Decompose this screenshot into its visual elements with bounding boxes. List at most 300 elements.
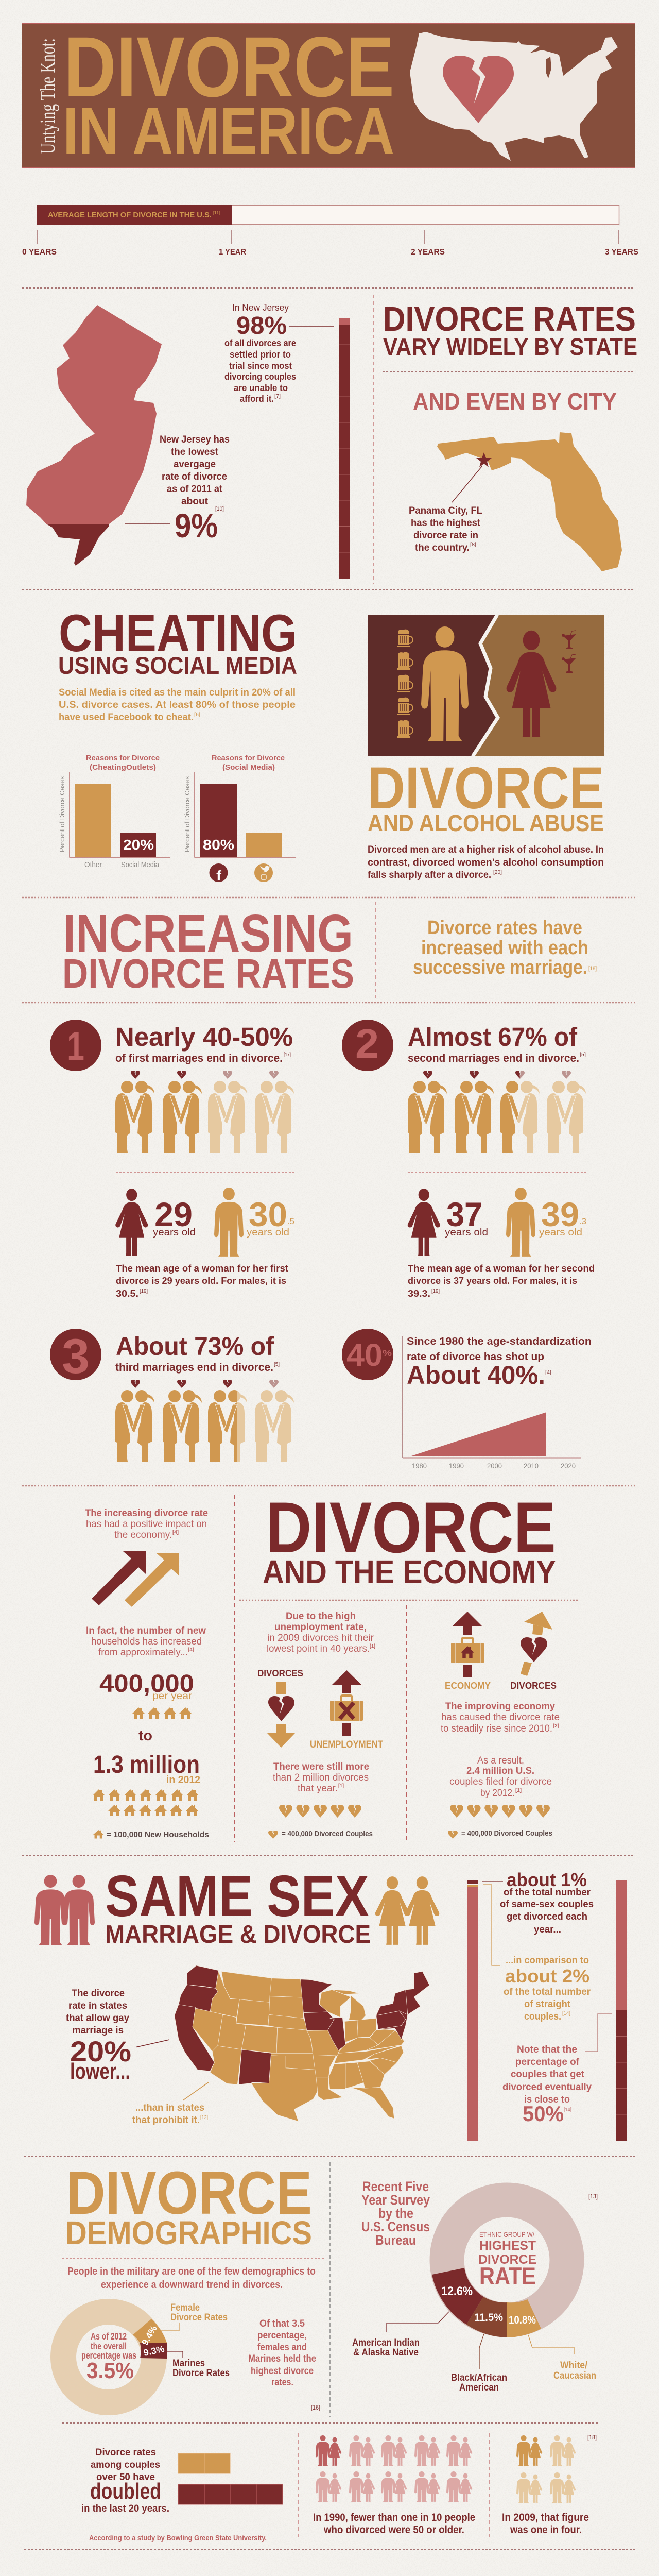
stat: 1.3 million in 2012: in 2012 (166, 1774, 200, 1786)
text: females and marines: rates. (271, 2377, 293, 2388)
text: about 2 percent: about 2% (505, 1965, 589, 1987)
text: about 73 percent: About 73% of (116, 1332, 274, 1361)
badge: number 1: 1 (67, 1023, 84, 1069)
text: 20 percent lower: rate in states (68, 2001, 127, 2011)
source note: 18: [18] (587, 2434, 597, 2441)
stat: nine percent: 9% (175, 506, 218, 545)
chart: reasons for divorce cheating outlets: Other (84, 860, 102, 869)
text: about 2 percent: ...in comparison to (506, 1955, 589, 1966)
text: about 73 percent (115, 1332, 280, 1374)
chart: average length of divorce timeline: 0 YEARS (22, 248, 57, 257)
text: social media paragraph: have used Facebook to cheat. (59, 712, 194, 723)
text: mean age first divorce: [19] (140, 1289, 148, 1294)
icon: man age 39.3 (506, 1188, 586, 1257)
label: black african american (451, 2334, 507, 2393)
stat: 400,000 per year: 400,000 (99, 1670, 194, 1698)
text: 1990 figure: who divorced were 50 or older. (323, 2524, 464, 2536)
icon: man age 30.5 (214, 1188, 294, 1257)
text: new jersey lowest rate: rate of divorce (162, 471, 227, 482)
text: about 2 percent (504, 1955, 591, 2022)
text: mean age second divorce: divorce is 37 years old. For males, it is (408, 1276, 577, 1286)
text: 1990 figure: In 1990, fewer than one in 10 people (313, 2512, 475, 2523)
icon row: five hearts (279, 1805, 361, 1818)
text: positive impact: [4] (172, 1530, 179, 1535)
text: close to 50 percent: Note that the (517, 2044, 577, 2055)
text: 20 percent lower (66, 1988, 131, 2084)
badge: 40 percent: 40 (346, 1337, 383, 1372)
text: about 2 percent: of straight (524, 1999, 571, 2010)
stat: 1.3 million in 2012: 1.3 million (93, 1751, 200, 1778)
heading: divorce: DIVORCE (368, 755, 604, 821)
label: american indian: American Indian (352, 2337, 420, 2348)
text: to: to (138, 1727, 152, 1743)
text: 2009 figure: was one in four. (510, 2524, 582, 2536)
text: high unemployment: in 2009 divorces hit their (267, 1633, 374, 1643)
text: new jersey lowest rate: [10] (215, 506, 224, 512)
text: nearly 40-50 percent: [17] (284, 1052, 291, 1058)
text: highest divorce rate: DIVORCE (478, 2252, 536, 2267)
text: high unemployment (267, 1611, 375, 1654)
icon: divorces rising: DIVORCES (510, 1681, 557, 1691)
text: 20 percent lower: that allow gay (66, 2013, 129, 2024)
text: high unemployment: [1] (370, 1643, 375, 1649)
heading: divorce and the economy: AND THE ECONOMY (263, 1553, 556, 1590)
text: military downward trend: People in the military are one of the few demographics to (67, 2266, 316, 2277)
text: about 1 percent: year... (534, 1924, 561, 1935)
chart: reasons for divorce social media: 80% (203, 837, 234, 853)
chart: military donut: percentage was (81, 2350, 136, 2361)
icon: woman age 29 (115, 1189, 196, 1256)
text: social media paragraph: [6] (194, 712, 200, 718)
text: highest divorce rate: ETHNIC GROUP W/ (479, 2230, 534, 2239)
label: white caucasian: White/ (560, 2360, 588, 2371)
heading: and even by city: AND EVEN BY CITY (413, 388, 617, 415)
text: females and marines: highest divorce (251, 2366, 314, 2377)
chart: military donut: the overall (91, 2341, 127, 2351)
text: 20 percent lower: The divorce (72, 1988, 125, 1999)
text: positive impact (85, 1508, 208, 1540)
text: doubled: doubled (90, 2479, 161, 2504)
legend: divorced couples: = 400,000 Divorced Couples (282, 1829, 373, 1838)
label: marines divorce rates: Marines (172, 2358, 205, 2369)
chart: reasons for divorce cheating outlets: Percent of Divorce Cases (58, 776, 66, 852)
chart: ethnic donut: 11.5% (474, 2312, 503, 2324)
text: almost 67 percent: Almost 67% of (408, 1022, 578, 1052)
text: mean age first divorce: 30.5. (116, 1289, 138, 1299)
text: settled prior to trial (224, 302, 296, 404)
icon: woman age 29: years old (153, 1227, 196, 1238)
panel: title banner (22, 20, 635, 168)
text: about 1 percent (500, 1869, 594, 1935)
text: still 2 million: There were still more (273, 1761, 369, 1772)
panel: 2009 one in four (502, 2434, 597, 2536)
text: census bureau survey: Recent Five (362, 2179, 429, 2194)
chart: reasons for divorce social media: Reasons for Divorce (212, 754, 285, 762)
text: improving economy: The improving economy (445, 1701, 555, 1712)
label: black african american: Black/African (451, 2372, 507, 2383)
text: census bureau survey (361, 2179, 430, 2248)
text: still 2 million: [1] (338, 1783, 344, 1789)
text: improving economy: has caused the divorce rate (441, 1712, 560, 1723)
chart: reasons for divorce cheating outlets: 20% (123, 837, 154, 853)
text: females and marines: females and (257, 2342, 307, 2353)
source note: 13: [13] (588, 2193, 598, 2200)
icon row: couples and hearts (115, 1071, 294, 1153)
text: 1990 figure (313, 2512, 475, 2536)
text: close to 50 percent: [14] (564, 2107, 571, 2113)
stat: 400,000 per year: per year (152, 1691, 193, 1702)
chart: area rise 1980 to 2010: 2000 (487, 1462, 502, 1470)
icon grid: four couples (516, 2435, 576, 2503)
icon: economy rising: ECONOMY (445, 1681, 491, 1691)
text: rates increase with each marriage: successive marriage. (413, 957, 587, 978)
label: american indian (352, 2312, 449, 2358)
heading: same sex: SAME SEX (105, 1863, 369, 1928)
text: settled prior to trial: settled prior to (230, 349, 291, 360)
text: nearly 40-50 percent: of first marriages end in divorce. (115, 1052, 283, 1064)
text: highest divorce rate (478, 2230, 536, 2290)
badge: 40 percent (342, 1329, 393, 1380)
icon row: couples and hearts (115, 1380, 294, 1462)
icon: divorces falling (257, 1668, 303, 1748)
label: marines divorce rates: Divorce Rates (172, 2368, 230, 2379)
text: nearly 40-50 percent: Nearly 40-50% (115, 1022, 293, 1052)
panel: cheating using social media (58, 604, 297, 883)
title: in america: IN AMERICA (63, 94, 394, 168)
panel: couples over fifty (81, 2447, 283, 2543)
text: close to 50 percent: couples that get (511, 2069, 585, 2080)
heading: increasing divorce rates (62, 904, 354, 996)
heading: cheating: CHEATING (59, 604, 297, 663)
text: 20 percent lower: 20% (70, 2035, 131, 2067)
map: united states by marriage law (175, 1965, 429, 2121)
panel: improving economy (441, 1612, 560, 1839)
text: almost 67 percent (408, 1022, 586, 1064)
heading: increasing divorce rates: INCREASING (63, 904, 353, 963)
panel: third marriages (50, 1329, 294, 1462)
icon: woman age 29: 29 (154, 1195, 193, 1233)
text: almost 67 percent: second marriages end in divorce. (408, 1052, 579, 1064)
text: 20 percent lower: lower... (70, 2059, 130, 2084)
panel: ethnic group donut (352, 2179, 598, 2393)
text: improving economy: [2] (553, 1723, 559, 1729)
label: white caucasian (528, 2335, 596, 2381)
text: alcohol paragraph (368, 844, 604, 880)
heading: divorce rates: DIVORCE RATES (383, 300, 636, 338)
icon: unemployment rising (310, 1670, 383, 1750)
text: still 2 million: than 2 million divorces (273, 1772, 369, 1783)
badge: number 3 (50, 1329, 101, 1384)
text: mean age second divorce: The mean age of a woman for her second (408, 1263, 595, 1274)
text: panama city: Panama City, FL (409, 505, 482, 516)
text: still 2 million: that year. (298, 1783, 338, 1794)
text: 2.4 million (449, 1755, 552, 1799)
chart: military donut: As of 2012 (91, 2331, 127, 2342)
text: 2.4 million: 2.4 million U.S. (466, 1766, 534, 1776)
text: mean age first divorce (116, 1263, 288, 1299)
heading: demographics: DEMOGRAPHICS (65, 2214, 312, 2251)
text: panama city: divorce rate in (413, 530, 478, 541)
title: divorce: DIVORCE (64, 20, 394, 115)
text: close to 50 percent: percentage of (515, 2057, 580, 2067)
chart: reasons for divorce cheating outlets: Reasons for Divorce (86, 754, 160, 762)
panel: first marriages (50, 1020, 294, 1299)
text: close to 50 percent (502, 2044, 592, 2126)
legend: divorced couples: = 400,000 Divorced Couples (461, 1829, 552, 1838)
text: mean age second divorce: [19] (431, 1289, 440, 1294)
chart: reasons for divorce cheating outlets: Social Media (121, 860, 160, 869)
chart: doubling blocks (178, 2453, 283, 2504)
label: black african american: American (459, 2382, 499, 2393)
text: 2.4 million: by 2012. (480, 1788, 515, 1799)
chart: average length of divorce timeline: 2 YEARS (411, 248, 445, 257)
text: new households: from approximately... (98, 1647, 188, 1658)
text: new jersey lowest rate: avergage (174, 459, 216, 470)
chart: reasons for divorce social media: (Social Media) (222, 763, 275, 772)
chart: reasons for divorce cheating outlets (58, 754, 170, 869)
text: panama city: [8] (470, 542, 476, 548)
text: females and marines (248, 2318, 316, 2388)
heading: increasing divorce rates: DIVORCE RATES (62, 951, 354, 996)
panel: 1990 one in ten (313, 2435, 475, 2536)
text: 2009 figure (502, 2512, 589, 2536)
text: still 2 million (273, 1761, 369, 1794)
text: improving economy (441, 1701, 560, 1734)
text: doubled: in the last 20 years. (81, 2503, 169, 2514)
chart: average length of divorce timeline: [11] (213, 210, 220, 215)
text: settled prior to trial: trial since most (229, 361, 292, 371)
icon: two rising arrows (92, 1551, 179, 1607)
text: alcohol paragraph: [20] (493, 870, 502, 875)
text: new jersey lowest rate: as of 2011 at (167, 484, 223, 495)
illustration: man and woman with drinks (368, 615, 604, 756)
text: rates increase with each marriage: Divorce rates have (427, 917, 582, 939)
text: close to 50 percent: is close to (524, 2094, 570, 2105)
icon: man age 30.5: years old (247, 1227, 289, 1238)
text: new households: households has increased (91, 1636, 202, 1647)
text: age-standardization rate (407, 1336, 592, 1389)
text: settled prior to trial: divorcing couples (224, 371, 296, 382)
text: almost 67 percent: [5] (580, 1052, 586, 1058)
icon row: couples and hearts (408, 1071, 586, 1153)
chart: military donut: 9.3% (143, 2344, 165, 2358)
label: marines divorce rates (167, 2351, 230, 2379)
icon: man age 39.3: years old (539, 1227, 582, 1238)
text: social media paragraph: U.S. divorce cases. At least 80% of those people (59, 700, 296, 710)
icon: woman age 37: years old (445, 1227, 488, 1238)
text: panama city: the country. (415, 543, 470, 553)
text: census bureau survey: U.S. Census (361, 2219, 430, 2234)
badge: 40 percent: % (383, 1348, 392, 1358)
text: military downward trend: experience a downward trend in divorces. (101, 2279, 283, 2291)
chart: area rise 1980 to 2010: 2020 (561, 1462, 576, 1470)
text: nearly 40-50 percent (115, 1022, 293, 1064)
icon row: four houses (132, 1707, 192, 1719)
text: settled prior to trial: 98% (236, 312, 287, 340)
text: about 1 percent: about 1% (507, 1869, 587, 1890)
text: census bureau survey: Year Survey (361, 2192, 430, 2208)
chart: military donut (63, 2312, 167, 2402)
text: settled prior to trial: In New Jersey (232, 302, 289, 313)
text: settled prior to trial: [7] (274, 394, 281, 399)
text: social media paragraph: Social Media is cited as the main culprit in 20% of all (59, 687, 296, 698)
chart: area rise 1980 to 2010: 1980 (412, 1462, 427, 1470)
chart: area rise 1980 to 2010: 2010 (524, 1462, 539, 1470)
text: panama city (409, 505, 482, 553)
icon: facebook: f (216, 868, 221, 883)
panel: 40 percent rise since 1980 (342, 1329, 592, 1470)
chart: area rise 1980 to 2010: 1990 (449, 1462, 464, 1470)
text: about 2 percent: couples. (524, 2011, 561, 2022)
text: alcohol paragraph: Divorced men are at a higher risk of alcohol abuse. In (368, 844, 604, 855)
panel: same sex marriage and divorce (34, 1863, 627, 2141)
text: age-standardization rate: Since 1980 the age-standardization (407, 1336, 592, 1347)
icon: divorces rising (510, 1612, 557, 1691)
text: new households: In fact, the number of new (86, 1625, 206, 1636)
text: social media paragraph (59, 687, 296, 723)
heading: marriage and divorce: MARRIAGE & DIVORCE (105, 1921, 371, 1948)
icon: two men (34, 1875, 95, 1945)
text: bowling green study: According to a study by Bowling Green State University. (89, 2534, 267, 2543)
text: than in states that prohibit it: that prohibit it. (132, 2115, 200, 2126)
text: age-standardization rate: About 40%. (407, 1361, 545, 1389)
label: american indian: & Alaska Native (353, 2347, 419, 2358)
label: female divorce rates: Female (170, 2302, 200, 2313)
text: new households (86, 1625, 206, 1658)
text: military downward trend (67, 2266, 316, 2291)
badge: number 2: 2 (355, 1021, 379, 1066)
badge: number 3: 3 (62, 1329, 90, 1384)
panel: households and economy (85, 1508, 209, 1839)
chart: ethnic donut: 12.6% (441, 2284, 473, 2298)
chart: ethnic donut: 10.8% (509, 2314, 536, 2326)
icon: facebook (209, 863, 228, 883)
icon: us map with broken heart (410, 32, 618, 161)
text: age-standardization rate: [4] (545, 1370, 551, 1376)
panel: unemployment and divorces (257, 1611, 383, 1839)
text: rates increase with each marriage (413, 917, 597, 978)
text: settled prior to trial: are unable to (234, 383, 288, 393)
chart: average length of divorce timeline: 3 YEARS (605, 248, 638, 257)
text: new jersey lowest rate: New Jersey has (160, 434, 230, 445)
text: panama city: has the highest (411, 518, 481, 529)
icon: woman age 37 (408, 1189, 488, 1256)
icon: woman age 37: 37 (446, 1195, 482, 1233)
text: settled prior to trial: of all divorces are (224, 338, 296, 348)
text: than in states that prohibit it (132, 2103, 208, 2126)
icon: new jersey map (26, 305, 162, 566)
text: doubled: Divorce rates (95, 2447, 156, 2458)
text: improving economy: to steadily rise since 2010. (441, 1723, 552, 1734)
text: alcohol paragraph: falls sharply after a divorce. (368, 870, 491, 880)
text: alcohol paragraph: contrast, divorced women's alcohol consumption (368, 857, 604, 868)
heading: vary widely by state: VARY WIDELY BY STATE (383, 333, 637, 360)
icon: two women (375, 1876, 439, 1945)
text: new jersey lowest rate (160, 434, 230, 512)
icon rows: thirteen houses (93, 1789, 199, 1816)
icon: man age 30.5: 30 (249, 1195, 287, 1233)
icon: twitter and instagram (254, 863, 273, 882)
text: new households: [4] (188, 1647, 194, 1653)
label: female divorce rates (161, 2302, 228, 2330)
text: females and marines: Of that 3.5 (259, 2318, 305, 2329)
text: highest divorce rate: HIGHEST (479, 2239, 536, 2253)
text: doubled: over 50 have (96, 2472, 155, 2483)
icon: divorces falling: DIVORCES (257, 1668, 303, 1679)
text: 20 percent lower: marriage is (72, 2025, 124, 2036)
text: than in states that prohibit it: ...than in states (135, 2103, 204, 2113)
text: about 73 percent: [5] (274, 1362, 280, 1367)
source note: 16: [16] (311, 2404, 320, 2411)
text: mean age first divorce: divorce is 29 years old. For males, it is (116, 1276, 286, 1286)
chart: reasons for divorce cheating outlets: (CheatingOutlets) (90, 763, 156, 772)
panel: divorce and alcohol abuse (368, 615, 604, 880)
text: females and marines: percentage, (257, 2330, 307, 2341)
text: new jersey lowest rate: the lowest (171, 447, 219, 457)
text: 2.4 million: [1] (515, 1788, 522, 1793)
icon: unemployment rising: UNEMPLOYMENT (310, 1739, 383, 1750)
text: rates increase with each marriage: increased with each (421, 937, 588, 959)
text: new jersey lowest rate: about (181, 496, 209, 507)
text: about 1 percent: of the total number (504, 1887, 591, 1898)
text: 2.4 million: couples filed for divorce (449, 1776, 552, 1787)
text: census bureau survey: by the (378, 2206, 413, 2221)
chart: military donut: 9.4% (140, 2324, 159, 2347)
text: than in states that prohibit it: [12] (200, 2115, 208, 2121)
label: female divorce rates: Divorce Rates (170, 2312, 228, 2323)
text: about 2 percent: of the total number (504, 1987, 591, 1997)
text: settled prior to trial: afford it. (240, 394, 274, 404)
text: 2009 figure: In 2009, that figure (502, 2512, 589, 2523)
text: close to 50 percent: divorced eventually (502, 2082, 592, 2093)
icon: man age 30.5: .5 (287, 1216, 294, 1226)
text: mean age second divorce: 39.3. (408, 1289, 430, 1299)
heading: using social media: USING SOCIAL MEDIA (58, 652, 297, 679)
heading: and alcohol abuse: AND ALCOHOL ABUSE (368, 810, 604, 836)
icon: economy rising (445, 1612, 491, 1691)
text: about 1 percent: of same-sex couples (500, 1899, 594, 1910)
icon grid: ten couples (316, 2435, 472, 2502)
text: 2.4 million: As a result, (477, 1755, 524, 1766)
legend: new households: = 100,000 New Households (107, 1831, 209, 1839)
chart: military donut: 3.5% (86, 2358, 134, 2383)
panel: new jersey statistics (26, 302, 350, 579)
icon row: six hearts (450, 1805, 550, 1818)
chart: 98 percent stacked bar (339, 318, 350, 579)
text: highest divorce rate: RATE (479, 2262, 536, 2290)
text: rates increase with each marriage: [18] (588, 965, 597, 972)
panel: divorce demographics military (62, 2159, 324, 2411)
text: females and marines: Marines held the (248, 2353, 316, 2364)
text: mean age first divorce: The mean age of a woman for her first (116, 1263, 288, 1274)
text: close to 50 percent: 50% (523, 2102, 564, 2126)
text: doubled: among couples (91, 2460, 160, 2470)
heading: divorce: DIVORCE (66, 2159, 312, 2227)
label: white caucasian: Caucasian (553, 2370, 596, 2381)
chart: right percentage bar (585, 1880, 627, 2141)
chart: average length of divorce timeline: AVERAGE LENGTH OF DIVORCE IN THE U.S. (48, 211, 212, 219)
text: positive impact: has had a positive impact on (86, 1519, 207, 1530)
text: positive impact: The increasing divorce rate (85, 1508, 208, 1519)
icon: man age 39.3: 39 (541, 1195, 579, 1233)
text: about 1 percent: get divorced each (507, 1911, 587, 1922)
heading: divorce and the economy: DIVORCE (266, 1487, 556, 1568)
chart: average length of divorce timeline: 1 YEAR (219, 248, 246, 257)
chart: ethnic donut (432, 2200, 567, 2337)
chart: area rise 1980 to 2010 (403, 1336, 581, 1470)
chart: reasons for divorce social media: Percent of Divorce Cases (183, 776, 191, 852)
chart: reasons for divorce social media (183, 754, 296, 857)
